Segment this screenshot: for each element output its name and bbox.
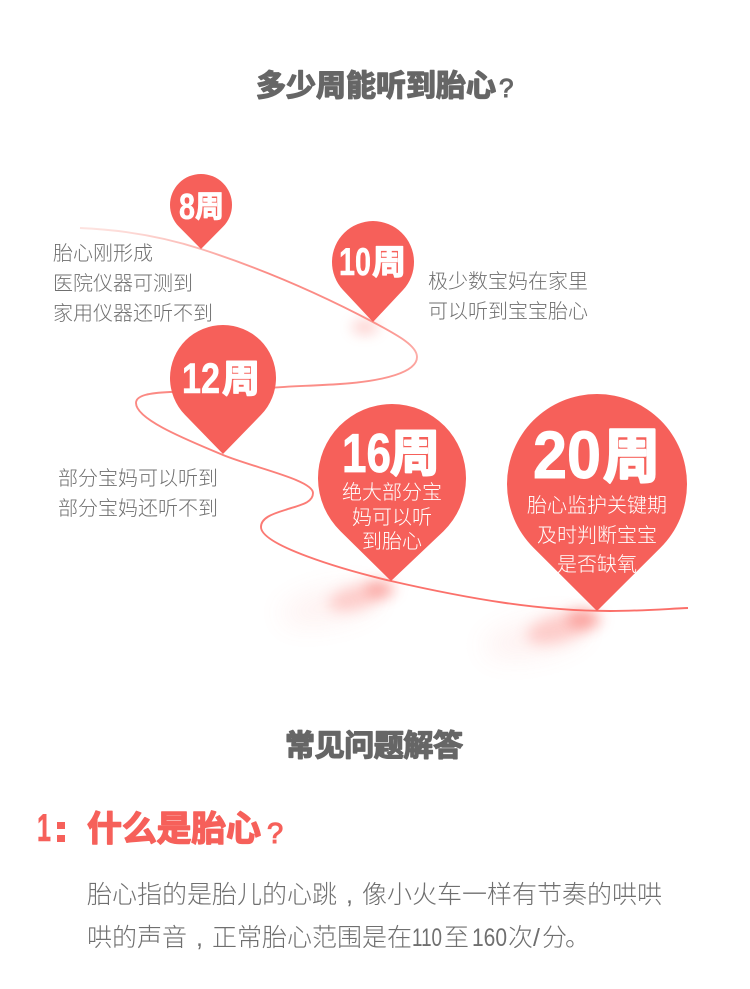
- answer text: 至: [444, 918, 469, 954]
- title: 多少周能听到胎心: [256, 61, 496, 105]
- text: 12 weeks note: 部分宝妈还听不到: [58, 492, 218, 521]
- answer text: 。: [565, 918, 590, 954]
- text: 10 weeks note: 极少数宝妈在家里: [428, 265, 588, 294]
- answer text: 像小火车一样有节奏的哄哄: [362, 875, 662, 911]
- answer text: ,: [196, 924, 203, 952]
- pin: 10 weeks: 10: [339, 241, 371, 284]
- pin shadows: [278, 321, 601, 664]
- text: 12 weeks note: [58, 462, 218, 521]
- text: 8 weeks note: 家用仪器还听不到: [53, 297, 213, 326]
- text: 8 weeks note: 胎心刚形成: [53, 237, 153, 266]
- answer text: 160: [472, 924, 507, 952]
- answer text: 分: [542, 918, 567, 954]
- pin: 20 weeks: 及时判断宝宝: [537, 519, 657, 548]
- timeline curve: [80, 228, 688, 611]
- pin: 20 weeks: [507, 394, 687, 611]
- pin: 16 weeks: 妈可以听: [352, 501, 432, 530]
- answer text: [87, 875, 662, 954]
- text: 8 weeks note: 医院仪器可测到: [53, 267, 193, 296]
- pin: 12 weeks: 12: [182, 355, 220, 403]
- pin: 20 weeks: 胎心监护关键期: [527, 489, 667, 518]
- question heading: ?: [267, 818, 283, 850]
- text: 12 weeks note: 部分宝妈可以听到: [58, 462, 218, 491]
- pin: 8 weeks: 8: [179, 186, 195, 227]
- pin: 8 weeks: 周: [195, 182, 224, 226]
- pin: 16 weeks: 到胎心: [362, 525, 422, 554]
- pin: 16 weeks: 16: [342, 422, 391, 484]
- question heading: 什么是胎心: [87, 810, 261, 849]
- answer text: 110: [412, 924, 442, 952]
- pin: 10 weeks: 周: [372, 235, 406, 284]
- text: 10 weeks note: 可以听到宝宝胎心: [428, 295, 588, 324]
- answer text: 正常胎心范围是在: [212, 918, 412, 954]
- pin: 8 weeks: [170, 174, 232, 249]
- pin: 16 weeks: 绝大部分宝: [342, 476, 442, 505]
- heading: FAQ: 常见问题解答: [285, 721, 463, 765]
- answer text: /: [533, 924, 540, 952]
- answer text: ,: [346, 881, 353, 909]
- pin: 12 weeks: [170, 325, 276, 454]
- pin: 20 weeks: 周: [603, 409, 660, 494]
- pin: 20 weeks: 20: [533, 418, 601, 493]
- pin: 16 weeks: 周: [390, 414, 440, 486]
- pin: 20 weeks: 是否缺氧: [557, 548, 637, 577]
- title: ?: [499, 73, 513, 103]
- answer text: 次: [508, 918, 533, 954]
- pin: 12 weeks: 周: [222, 348, 260, 403]
- pin: 10 weeks: [332, 221, 414, 322]
- answer text: 胎心指的是胎儿的心跳: [87, 875, 337, 911]
- question heading: [37, 807, 283, 850]
- text: 10 weeks note: [428, 265, 588, 324]
- pin: 16 weeks: [318, 404, 466, 581]
- answer text: 哄的声音: [87, 918, 187, 954]
- text: 8 weeks note: [53, 237, 213, 326]
- question heading: 1: [37, 807, 51, 850]
